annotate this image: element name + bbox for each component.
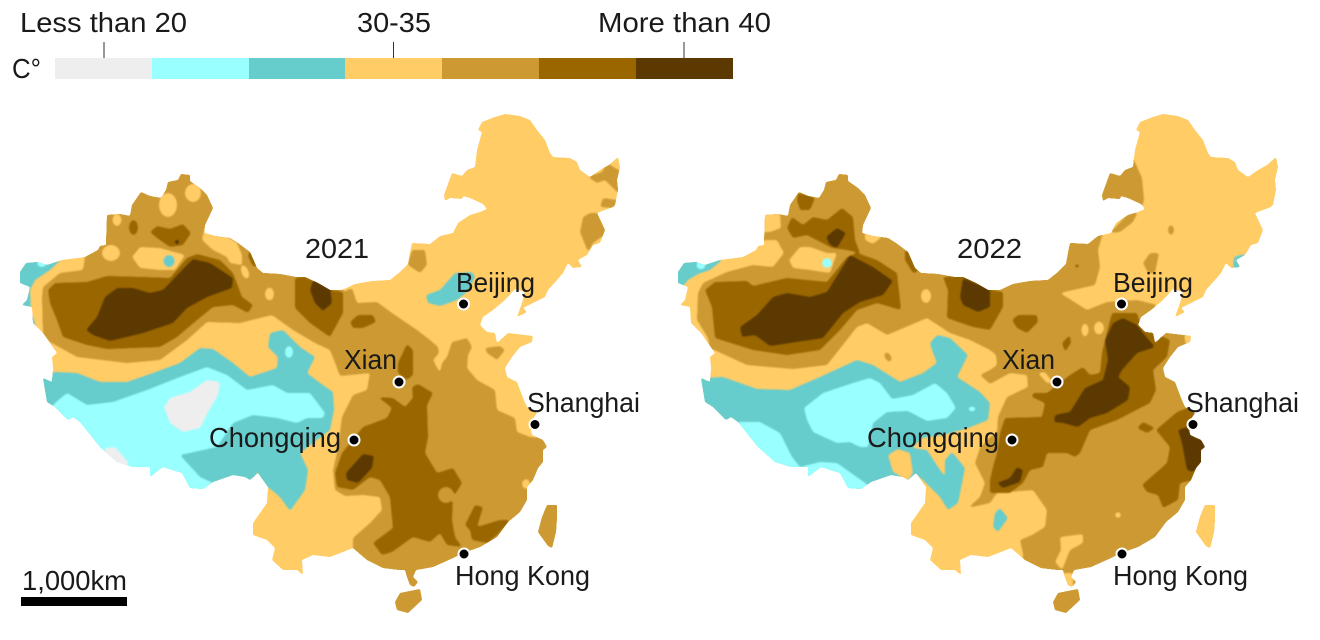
city: Chongqing: Chongqing — [867, 422, 999, 453]
zone: tan 2021 — [42, 150, 622, 625]
zone: teal 2022 — [673, 253, 1247, 532]
zone: teal 2021 — [10, 250, 475, 511]
city: Shanghai: Shanghai — [1186, 387, 1299, 418]
city: Shanghai — [527, 387, 640, 430]
zone: brown 2021 — [48, 220, 510, 555]
city: Xian — [1002, 344, 1062, 388]
scale bar: 1,000km — [22, 565, 127, 596]
zone: brown 2022 — [705, 193, 1213, 508]
city: Xian: Xian — [344, 344, 397, 375]
legend colour scale — [55, 58, 733, 79]
zone: small yellow patch 2022 — [888, 449, 913, 480]
city: Shanghai — [1186, 387, 1299, 430]
map: 2021 — [0, 100, 640, 630]
city: Hong Kong: Hong Kong — [455, 560, 590, 591]
legend ticks — [104, 42, 684, 58]
zone: light blue 2022 — [696, 258, 976, 500]
zone: tan 2022 — [696, 159, 1215, 613]
legend — [12, 7, 771, 84]
city: Beijing: Beijing — [1113, 267, 1193, 298]
legend label: less than 20: Less than 20 — [20, 7, 187, 38]
zone: dark brown 2022 — [740, 228, 1210, 488]
year label: 2022: 2022 — [957, 233, 1022, 264]
city: Xian: Xian — [1002, 344, 1055, 375]
city: Xian — [344, 344, 404, 388]
zone: grey 2021 — [105, 380, 220, 475]
temperature contours 2022 — [678, 114, 1278, 613]
zone: light blue 2021 — [36, 262, 325, 489]
legend label: more than 40: More than 40 — [598, 7, 771, 38]
city: Hong Kong: Hong Kong — [1113, 560, 1248, 591]
year label: 2021: 2021 — [305, 233, 369, 264]
zone: yellow pockets 2022 — [758, 213, 1223, 590]
city: Chongqing: Chongqing — [209, 422, 341, 453]
map: 2022 — [658, 100, 1299, 630]
city: Beijing — [456, 267, 535, 310]
legend unit label: C° — [12, 53, 41, 84]
zone: yellow pockets 2021 — [102, 184, 530, 489]
city: Beijing: Beijing — [456, 267, 535, 298]
zone: dark brown 2021 — [86, 240, 374, 483]
temperature contours 2021 — [20, 114, 620, 613]
zone: small tan spots 2022 — [884, 352, 892, 362]
legend label: 30-35: 30-35 — [357, 7, 431, 38]
city: Shanghai: Shanghai — [527, 387, 640, 418]
